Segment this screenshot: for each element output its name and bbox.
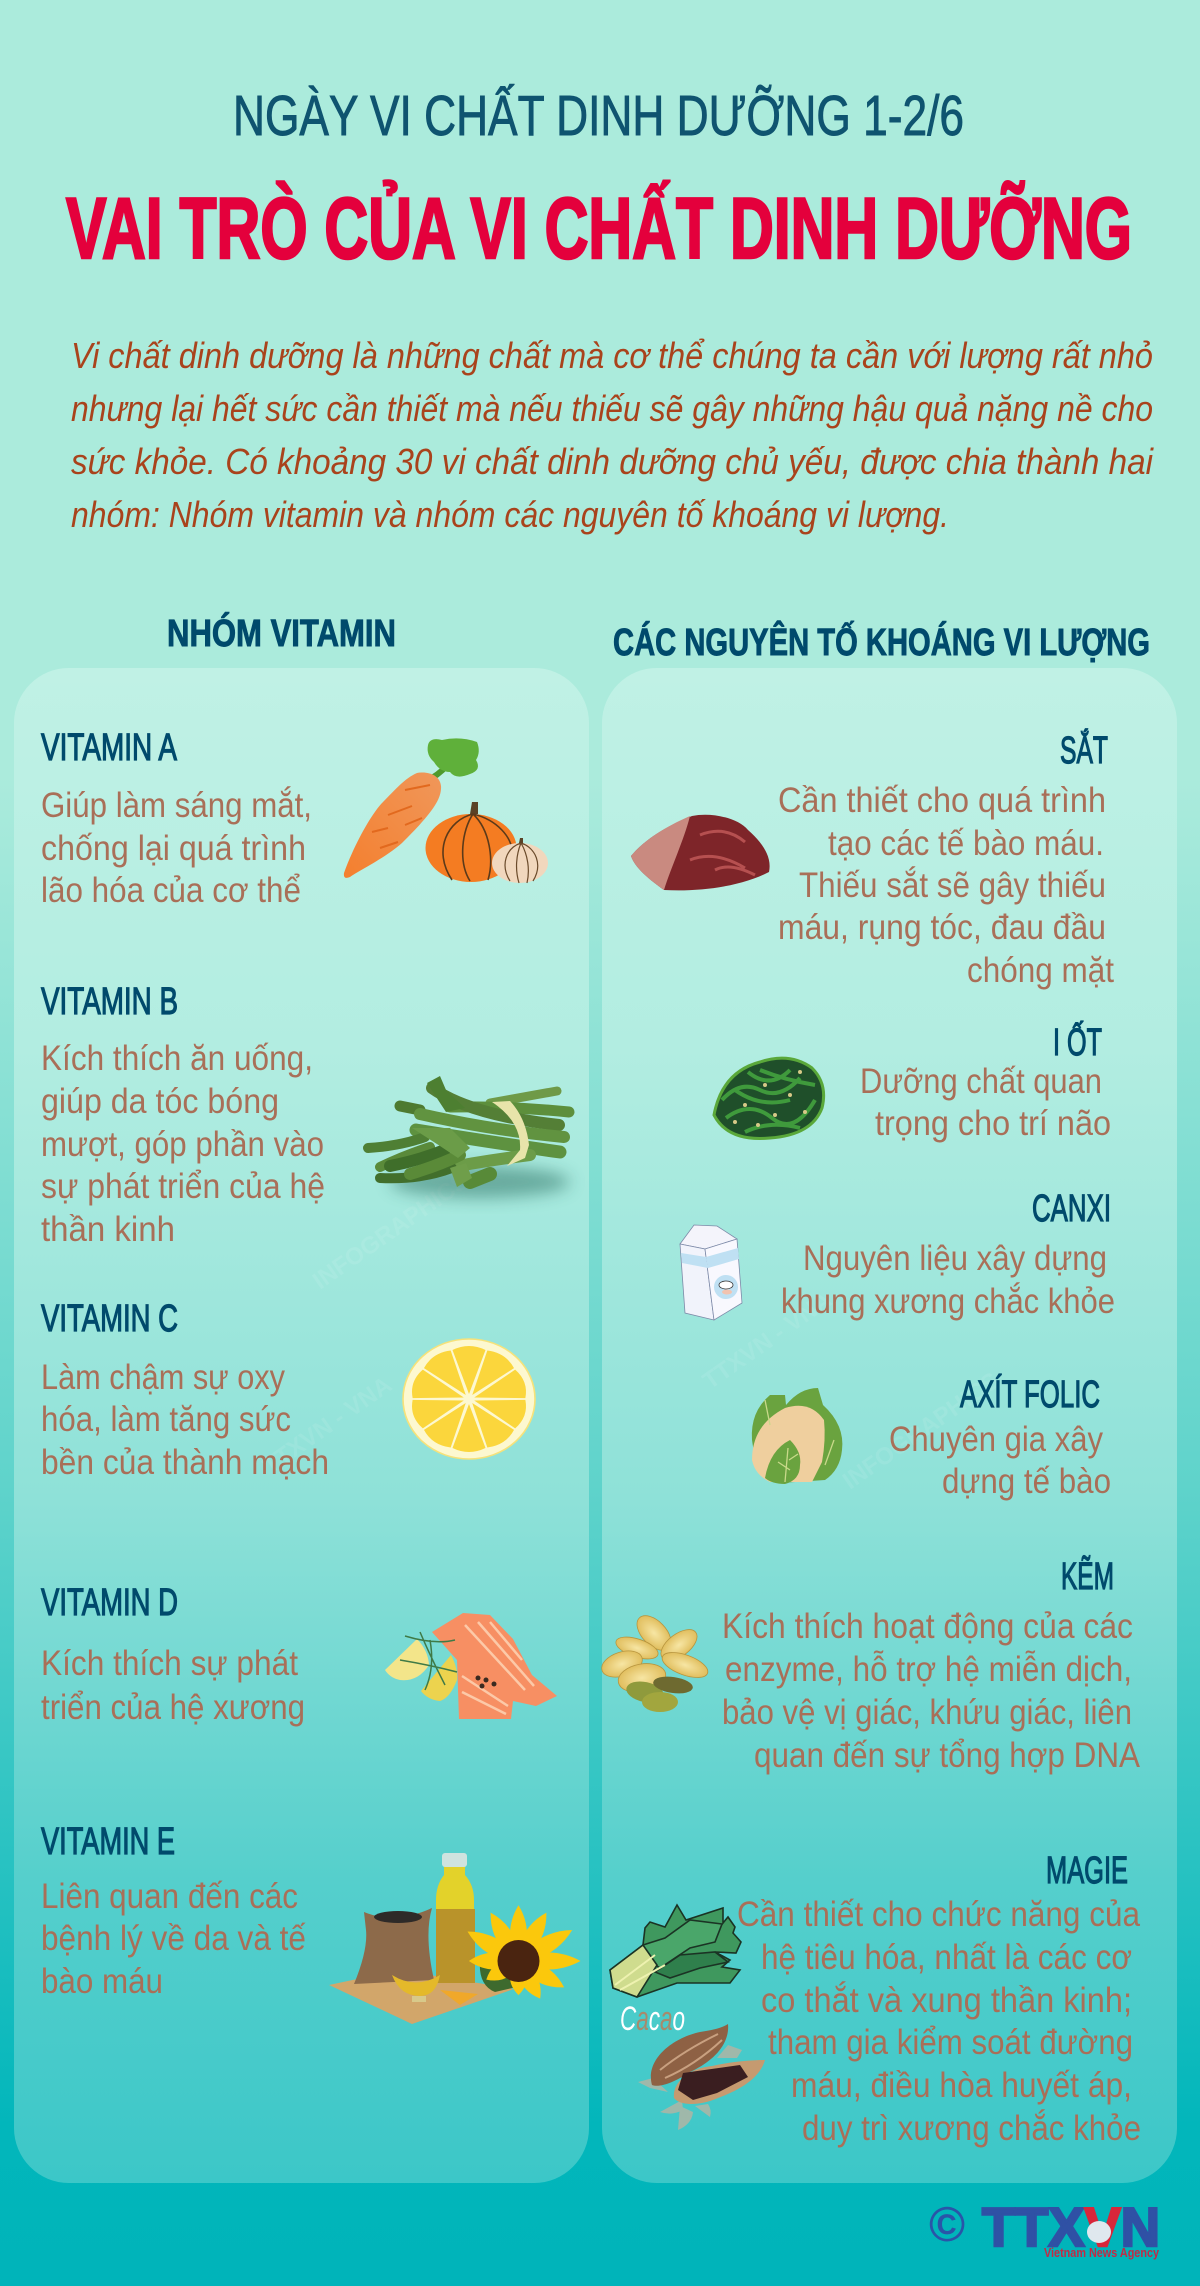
- watermark: INFOGRAPHICS: [838, 1367, 1004, 1495]
- mineral: iodine: Dưỡng chất quan: [860, 1061, 1102, 1101]
- mineral: iodine: [860, 1019, 1111, 1143]
- intro paragraph: nhóm: Nhóm vitamin và nhóm các nguyên tố khoáng vi lượng.: [71, 494, 949, 535]
- watermark: TTXVN - VNA: [698, 1286, 837, 1395]
- icon: copyright: ©: [929, 2198, 965, 2252]
- vitamin B: [41, 981, 325, 1249]
- vitamin D: [41, 1582, 305, 1727]
- watermark: [258, 1167, 1004, 1495]
- icon: spinach: [610, 1905, 741, 1997]
- mineral: magnesium: tham gia kiểm soát đường: [768, 2022, 1133, 2062]
- icon: seaweed: [714, 1058, 824, 1139]
- mineral: iron: SẮT: [1060, 728, 1108, 772]
- mineral: iodine: I ỐT: [1053, 1019, 1102, 1064]
- vitamin A: Giúp làm sáng mắt,: [41, 785, 312, 825]
- vitamin D: triển của hệ xương: [41, 1687, 305, 1727]
- vitamin E: VITAMIN E: [41, 1821, 175, 1863]
- mineral: magnesium: [737, 1850, 1141, 2148]
- vitamin A: chống lại quá trình: [41, 828, 306, 868]
- vitamin E: bệnh lý về da và tế: [41, 1918, 306, 1958]
- mineral: zinc: Kích thích hoạt động của các: [722, 1606, 1133, 1646]
- panel: minerals: [602, 668, 1177, 2183]
- mineral: iron: chóng mặt: [967, 950, 1114, 990]
- icon: asparagus: [368, 1076, 570, 1198]
- vitamin C: hóa, làm tăng sức: [41, 1399, 291, 1439]
- logo: TTXVN: Vietnam News Agency: [1044, 2245, 1160, 2260]
- mineral: calcium: [781, 1188, 1115, 1321]
- mineral: zinc: [722, 1555, 1140, 1775]
- vitamin D: Kích thích sự phát: [41, 1643, 298, 1683]
- vitamin B: thần kinh: [41, 1209, 175, 1249]
- vitamin D: VITAMIN D: [41, 1582, 178, 1624]
- panel: vitamin: [14, 668, 589, 2183]
- mineral: iodine: trọng cho trí não: [875, 1103, 1111, 1143]
- mineral: zinc: KẼM: [1061, 1555, 1114, 1598]
- vitamin A: VITAMIN A: [41, 727, 177, 769]
- vitamin C: VITAMIN C: [41, 1298, 178, 1340]
- icon: sunflower oil and seeds: [329, 1853, 580, 2024]
- title: event line: NGÀY VI CHẤT DINH DƯỠNG 1-2/6: [233, 83, 964, 148]
- vitamin B: Kích thích ăn uống,: [41, 1038, 313, 1078]
- icon: lemon slice: [403, 1339, 535, 1459]
- vitamin B: sự phát triển của hệ: [41, 1166, 325, 1206]
- vitamin B: mượt, góp phần vào: [41, 1124, 324, 1164]
- logo: TTXVN: TTXVN: [982, 2196, 1160, 2258]
- mineral: magnesium: máu, điều hòa huyết áp,: [791, 2065, 1132, 2105]
- icon: milk carton: [680, 1225, 742, 1320]
- mineral: calcium: khung xương chắc khỏe: [781, 1281, 1115, 1321]
- mineral: magnesium: co thắt và xung thần kinh;: [761, 1980, 1132, 2020]
- icon: carrot and pumpkins: [344, 738, 548, 883]
- mineral: magnesium: duy trì xương chắc khỏe: [802, 2108, 1141, 2148]
- mineral: calcium: CANXI: [1032, 1188, 1111, 1230]
- mineral: iron: Cần thiết cho quá trình: [778, 780, 1106, 820]
- mineral: magnesium: Cần thiết cho chức năng của: [737, 1894, 1140, 1934]
- vitamin C: Làm chậm sự oxy: [41, 1357, 285, 1397]
- icon: salmon with lemon: [385, 1613, 557, 1719]
- watermark: TTXVN - VNA: [258, 1371, 397, 1480]
- label: cacao: Cacao: [620, 2000, 685, 2038]
- vitamin C: [41, 1298, 329, 1482]
- mineral: magnesium: MAGIE: [1046, 1850, 1128, 1892]
- icon: liver: [631, 815, 770, 890]
- vitamin C: bền của thành mạch: [41, 1442, 329, 1482]
- mineral: iron: máu, rụng tóc, đau đầu: [778, 907, 1106, 947]
- mineral: folic acid: Chuyên gia xây: [889, 1419, 1103, 1459]
- mineral: iron: [778, 728, 1114, 990]
- icon: pumpkin seeds: [598, 1610, 711, 1712]
- heading: vitamin group: NHÓM VITAMIN: [167, 611, 396, 655]
- mineral: folic acid: [889, 1373, 1111, 1501]
- vitamin A: lão hóa của cơ thể: [41, 870, 301, 910]
- vitamin E: [41, 1821, 306, 2001]
- mineral: calcium: Nguyên liệu xây dựng: [803, 1238, 1107, 1278]
- mineral: iron: tạo các tế bào máu.: [828, 823, 1104, 863]
- mineral: iron: Thiếu sắt sẽ gây thiếu: [799, 865, 1106, 905]
- vitamin A: [41, 727, 312, 910]
- mineral: magnesium: hệ tiêu hóa, nhất là các cơ: [761, 1937, 1132, 1977]
- vitamin B: giúp da tóc bóng: [41, 1081, 279, 1121]
- vitamin E: Liên quan đến các: [41, 1876, 298, 1916]
- icon: cauliflower: [752, 1388, 842, 1484]
- vitamin B: VITAMIN B: [41, 981, 178, 1023]
- intro paragraph: [71, 335, 1154, 535]
- mineral: zinc: bảo vệ vị giác, khứu giác, liên: [722, 1692, 1132, 1732]
- mineral: folic acid: AXÍT FOLIC: [960, 1373, 1100, 1416]
- mineral: zinc: enzyme, hỗ trợ hệ miễn dịch,: [725, 1649, 1132, 1689]
- vitamin E: bào máu: [41, 1961, 163, 2001]
- icon: cacao pods: [638, 2024, 765, 2130]
- mineral: zinc: quan đến sự tổng hợp DNA: [754, 1735, 1140, 1775]
- mineral: folic acid: dựng tế bào: [942, 1461, 1111, 1501]
- watermark: INFOGRAPHICS: [308, 1167, 474, 1295]
